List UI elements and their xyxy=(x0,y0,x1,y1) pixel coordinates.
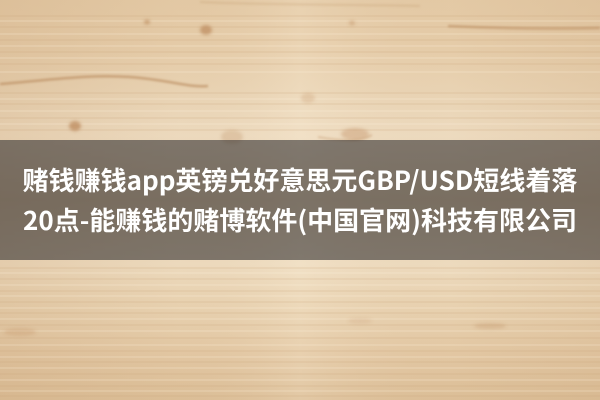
dark translucent title band xyxy=(0,140,600,260)
wood knots xyxy=(4,20,506,336)
title: 赌钱赚钱app英镑兑好意思元GBP/USD短线着落 xyxy=(23,161,577,198)
title: 20点-能赚钱的赌博软件(中国官网)科技有限公司 xyxy=(23,201,577,238)
darker grain streaks xyxy=(0,2,600,140)
title xyxy=(23,161,577,238)
